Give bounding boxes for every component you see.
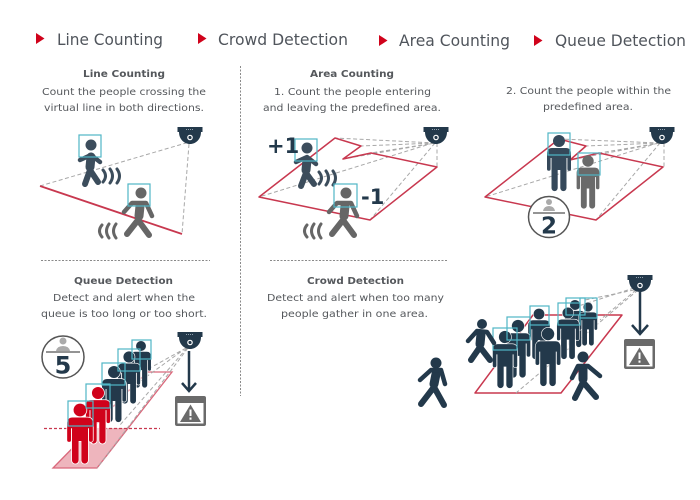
- panel: area counting 1: [259, 69, 448, 238]
- icon: alert arrow: [182, 351, 196, 391]
- nav: Queue Detection: Queue Detection: [555, 31, 686, 50]
- icon: count badge 5: [42, 336, 84, 380]
- panel: area counting 2: [485, 86, 674, 240]
- text: area counting step 2: [506, 86, 671, 113]
- icon: count badge 2: [528, 196, 570, 240]
- panel: line counting: [40, 69, 206, 238]
- icon: walker bottom left: [420, 358, 445, 405]
- heading: queue detection: Queue Detection: [74, 276, 173, 287]
- icon: count badge 5: 5: [55, 352, 71, 380]
- text: line counting description: Count the people crossing the: [42, 87, 206, 98]
- text: line counting description: [42, 87, 206, 114]
- nav: Area Counting: Area Counting: [399, 31, 510, 50]
- text: queue detection description: queue is too long or too short.: [41, 309, 207, 320]
- chart: line counting scene: [40, 127, 202, 238]
- text: queue detection description: Detect and alert when the: [53, 293, 195, 304]
- heading: line counting: Line Counting: [83, 69, 165, 80]
- icon: walker top left: [468, 319, 494, 360]
- text: area counting step 2: 2. Count the people within the: [506, 86, 671, 97]
- text: line counting description: virtual line in both directions.: [44, 103, 204, 114]
- text: area counting step 1: and leaving the predefined area.: [263, 103, 441, 114]
- icon: alert arrow: [632, 292, 648, 334]
- text: crowd detection description: [267, 293, 444, 320]
- nav: Line Counting: Line Counting: [57, 30, 163, 49]
- icon: alert window: [175, 396, 206, 426]
- icon: walker right: [572, 352, 600, 398]
- text: crowd detection description: Detect and alert when too many: [267, 293, 444, 304]
- chart: people within area scene: [485, 127, 674, 240]
- text: crowd detection description: people gather in one area.: [281, 309, 428, 320]
- text: area counting step 1: [263, 87, 441, 114]
- icon: count badge 2: 2: [541, 214, 557, 240]
- panel: crowd detection: [267, 275, 655, 405]
- chart: area entering and leaving scene: [259, 127, 448, 238]
- heading: crowd detection: Crowd Detection: [307, 276, 404, 287]
- label: minus one: -1: [361, 185, 384, 209]
- chart: queue scene: [42, 332, 206, 468]
- label: plus one: +1: [267, 134, 299, 158]
- text: queue detection description: [41, 293, 207, 320]
- text: area counting step 1: 1. Count the people entering: [274, 87, 431, 98]
- text: area counting step 2: predefined area.: [543, 102, 633, 113]
- heading: area counting: Area Counting: [310, 69, 394, 80]
- icon: alert window: [624, 339, 655, 369]
- chart: crowd scene: [420, 275, 655, 405]
- nav: Crowd Detection: Crowd Detection: [218, 30, 348, 49]
- panel: queue detection: [41, 276, 207, 468]
